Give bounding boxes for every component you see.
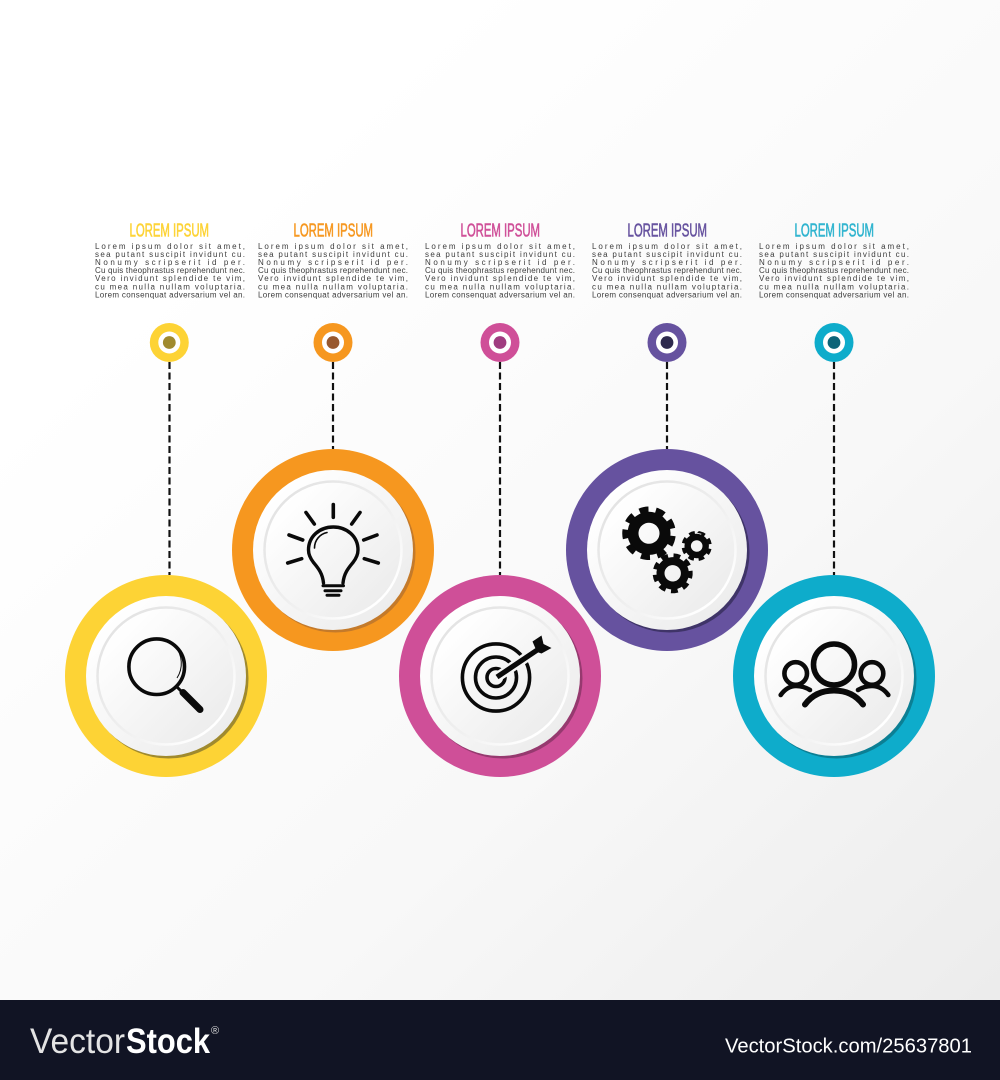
footer logo: Vector	[30, 1022, 125, 1061]
text block 4: sea putant suscipit invidunt cu.	[592, 250, 742, 259]
dashed connector 4	[666, 362, 668, 449]
text block 4: Lorem consenquat adversarium vel an.	[592, 290, 742, 299]
footer bar	[0, 1000, 1000, 1080]
text block 2	[258, 242, 408, 299]
connector dot 4	[648, 323, 686, 362]
column 1: yellow	[65, 220, 267, 777]
heading 1: LOREM IPSUM	[130, 220, 209, 240]
text block 1: Lorem consenquat adversarium vel an.	[95, 290, 245, 299]
text block 5: Vero invidunt splendide te vim,	[759, 274, 909, 283]
text block 5: cu mea nulla nullam voluptaria.	[759, 282, 909, 291]
connector dot 2	[314, 323, 352, 362]
circle badge 3	[399, 575, 601, 777]
heading 2: LOREM IPSUM	[294, 220, 373, 240]
text block 4: Lorem ipsum dolor sit amet,	[592, 242, 742, 251]
text block 1: Cu quis theophrastus reprehendunt nec.	[95, 266, 245, 275]
column 5: teal	[733, 220, 935, 777]
text block 5: sea putant suscipit invidunt cu.	[759, 250, 909, 259]
circle badge 4	[566, 449, 768, 651]
text block 3: Lorem ipsum dolor sit amet,	[425, 242, 575, 251]
text block 1	[95, 242, 245, 299]
icon: magnifying glass	[129, 639, 200, 710]
column 3: pink	[399, 220, 601, 777]
text block 1: sea putant suscipit invidunt cu.	[95, 250, 245, 259]
heading 4: LOREM IPSUM	[628, 220, 707, 240]
text block 2: Lorem ipsum dolor sit amet,	[258, 242, 408, 251]
icon: group of people	[781, 644, 888, 704]
text block 5: Lorem consenquat adversarium vel an.	[759, 290, 909, 299]
column 4: purple	[566, 220, 768, 651]
text block 1: cu mea nulla nullam voluptaria.	[95, 282, 245, 291]
text block 4: Cu quis theophrastus reprehendunt nec.	[592, 266, 742, 275]
heading 5: LOREM IPSUM	[794, 220, 874, 240]
text block 4: Vero invidunt splendide te vim,	[592, 274, 742, 283]
text block 3: cu mea nulla nullam voluptaria.	[425, 282, 575, 291]
text block 3: Cu quis theophrastus reprehendunt nec.	[425, 266, 575, 275]
text block 3	[425, 242, 575, 299]
text block 1: Lorem ipsum dolor sit amet,	[95, 242, 245, 251]
text block 2: cu mea nulla nullam voluptaria.	[258, 282, 408, 291]
footer logo	[30, 1022, 219, 1061]
text block 1: Vero invidunt splendide te vim,	[95, 274, 245, 283]
text block 3: Lorem consenquat adversarium vel an.	[425, 290, 575, 299]
text block 3: sea putant suscipit invidunt cu.	[425, 250, 575, 259]
icon: gears	[622, 507, 712, 593]
dashed connector 5	[833, 362, 835, 575]
text block 3: Vero invidunt splendide te vim,	[425, 274, 575, 283]
footer image id: VectorStock.com/25637801	[725, 1036, 972, 1058]
text block 4	[592, 242, 742, 299]
text block 4: Nonumy scripserit id per.	[592, 258, 742, 267]
text block 2: Vero invidunt splendide te vim,	[258, 274, 408, 283]
text block 5: Lorem ipsum dolor sit amet,	[759, 242, 909, 251]
icon: target with arrow	[462, 636, 552, 711]
connector dot 3	[480, 323, 520, 362]
dashed connector 2	[332, 362, 334, 449]
connector dot 1	[150, 323, 189, 362]
connector dot 5	[814, 323, 854, 362]
column 2: orange	[232, 220, 434, 651]
text block 3: Nonumy scripserit id per.	[425, 258, 575, 267]
text block 5: Cu quis theophrastus reprehendunt nec.	[759, 266, 909, 275]
footer logo: ®	[211, 1025, 219, 1037]
circle badge 2	[232, 449, 434, 651]
dashed connector 1	[168, 362, 171, 575]
text block 4: cu mea nulla nullam voluptaria.	[592, 282, 742, 291]
text block 5: Nonumy scripserit id per.	[759, 258, 909, 267]
text block 2: Cu quis theophrastus reprehendunt nec.	[258, 266, 408, 275]
text block 2: sea putant suscipit invidunt cu.	[258, 250, 408, 259]
circle badge 1	[65, 575, 267, 777]
text block 2: Nonumy scripserit id per.	[258, 258, 408, 267]
circle badge 5	[733, 575, 935, 777]
dashed connector 3	[499, 362, 501, 575]
text block 5	[759, 242, 909, 299]
footer logo: Stock	[126, 1022, 210, 1061]
heading 3: LOREM IPSUM	[460, 220, 540, 240]
text block 2: Lorem consenquat adversarium vel an.	[258, 290, 408, 299]
text block 1: Nonumy scripserit id per.	[95, 258, 245, 267]
icon: light bulb	[288, 504, 378, 595]
